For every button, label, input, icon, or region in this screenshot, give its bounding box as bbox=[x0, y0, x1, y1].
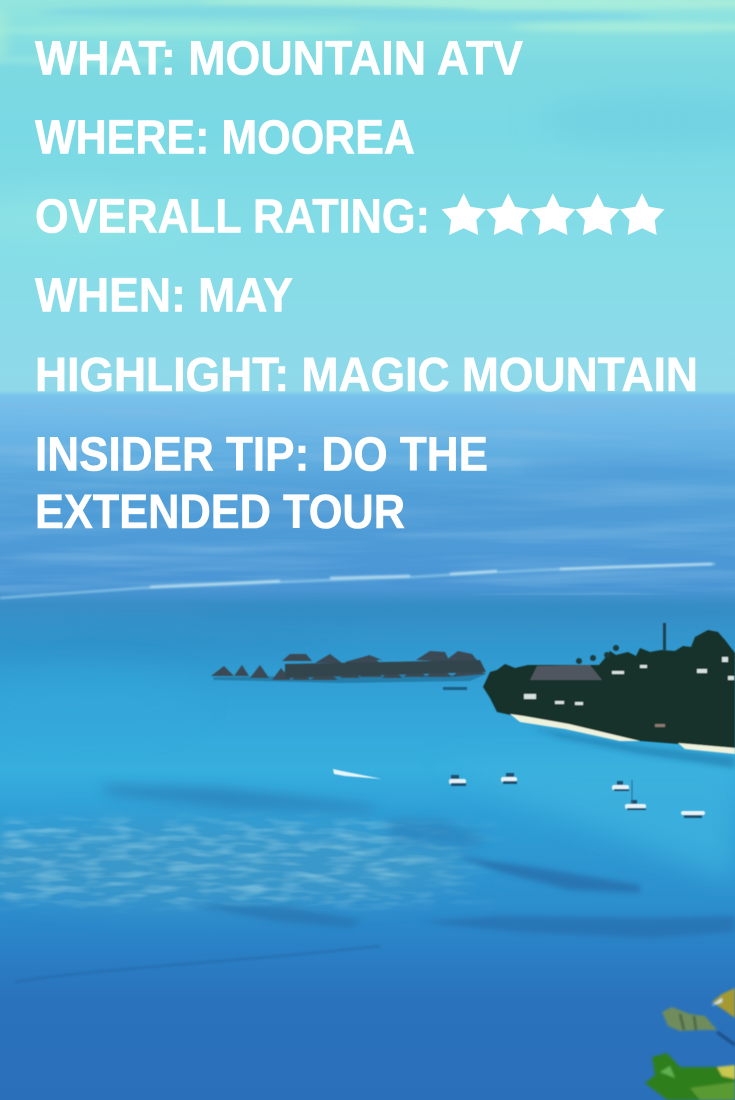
building highlights bbox=[524, 657, 734, 727]
palm tops bbox=[576, 645, 619, 664]
text: overall rating: OVERALL RATING: bbox=[35, 191, 430, 244]
water shadow below shore bbox=[530, 727, 735, 768]
text: when: WHEN: MAY bbox=[35, 270, 293, 323]
text: insider tip: EXTENDED TOUR bbox=[35, 486, 405, 539]
tree canopy bbox=[483, 630, 735, 748]
boats bbox=[333, 769, 705, 818]
bungalow reflections bbox=[213, 674, 486, 683]
overwater bungalows bbox=[211, 651, 486, 690]
text: where: WHERE: MOOREA bbox=[35, 112, 415, 165]
text: insider tip bbox=[35, 428, 488, 539]
foliage bottom right bbox=[645, 988, 735, 1100]
beach bbox=[510, 714, 640, 741]
icon: five star rating bbox=[442, 193, 665, 235]
palm shore headland bbox=[483, 623, 735, 768]
text: insider tip: INSIDER TIP: DO THE bbox=[35, 428, 488, 481]
text: highlight: HIGHLIGHT: MAGIC MOUNTAIN bbox=[35, 349, 698, 402]
reef shadows bbox=[100, 785, 380, 812]
reef surf line bbox=[0, 564, 715, 598]
hotel roof bbox=[530, 665, 602, 680]
text: what: WHAT: MOUNTAIN ATV bbox=[35, 33, 523, 86]
radio mast bbox=[663, 623, 666, 651]
